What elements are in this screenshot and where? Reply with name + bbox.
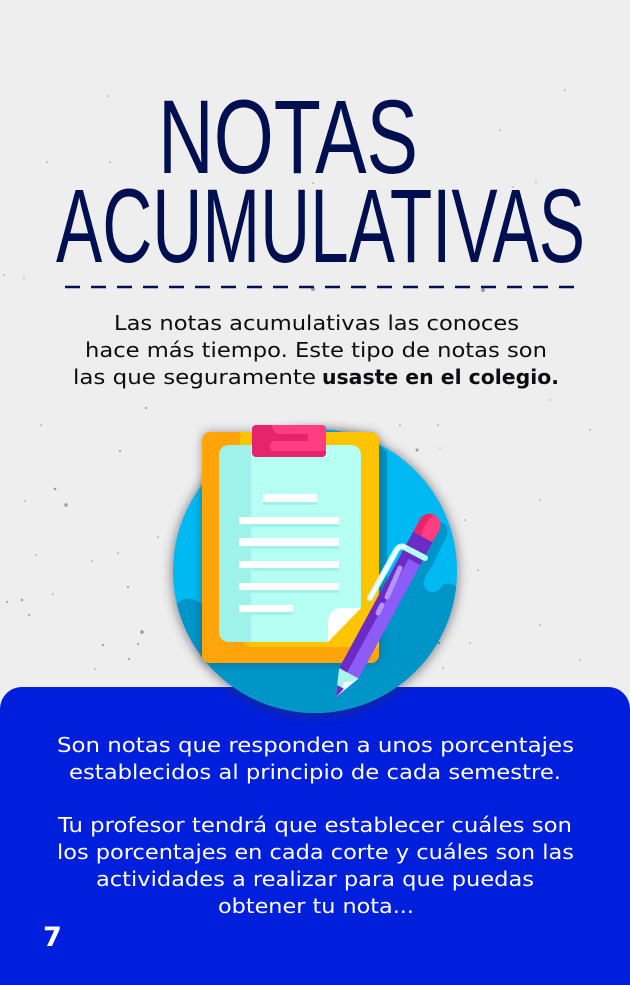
intro text: las que seguramente	[73, 365, 316, 389]
page number: 7	[43, 922, 62, 953]
title line: NOTAS: NOTAS	[158, 79, 418, 196]
paper	[219, 445, 361, 642]
intro text	[73, 311, 559, 389]
illustration: clipboard and pen in circle	[170, 425, 460, 720]
text lines	[239, 500, 339, 615]
body text: obtener tu nota...	[218, 894, 414, 918]
intro text: Las notas acumulativas las conoces	[114, 311, 519, 335]
body text	[57, 733, 574, 918]
clip	[252, 425, 326, 457]
icon: circle background	[170, 429, 460, 720]
intro text: usaste en el colegio.	[322, 365, 559, 389]
body text: establecidos al principio de cada semestre.	[69, 760, 561, 784]
pen clip	[370, 546, 425, 598]
body text: Tu profesor tendrá que establecer cuáles son	[57, 813, 572, 837]
title	[56, 79, 585, 285]
blue panel	[0, 687, 630, 985]
icon: clipboard	[202, 425, 379, 663]
body text: los porcentajes en cada corte y cuáles son las	[57, 840, 574, 864]
icon: pen	[326, 510, 444, 702]
body text: Son notas que responden a unos porcentajes	[57, 733, 574, 757]
body text: actividades a realizar para que puedas	[96, 867, 534, 891]
paper fold	[328, 608, 361, 642]
intro text: hace más tiempo. Este tipo de notas son	[85, 338, 547, 362]
